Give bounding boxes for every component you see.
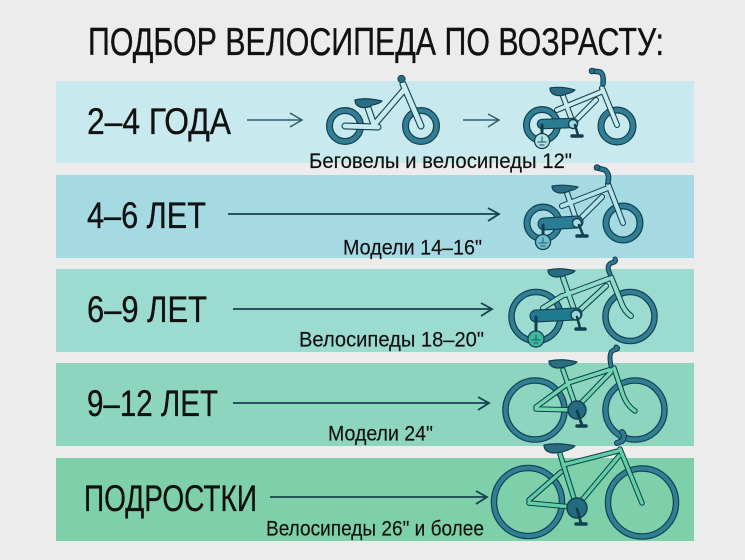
panel: 2–4 года: [56, 68, 694, 173]
caption: Беговелы и велосипеды 12": [309, 150, 572, 173]
heading: 6–9 лет: 6–9 ЛЕТ: [87, 289, 207, 330]
arrow: to balance bike: [247, 113, 302, 127]
arrow: to 12 inch bike: [463, 114, 499, 127]
caption: Модели 24": [328, 422, 433, 446]
heading: 2–4 года: 2–4 ГОДА: [87, 101, 231, 142]
heading: подростки: ПОДРОСТКИ: [84, 478, 257, 519]
panel: 4–6 лет: [56, 165, 694, 260]
panel: подростки: [56, 432, 694, 541]
icon: 14–16 inch bike: [527, 165, 640, 250]
arrow: [233, 397, 489, 410]
icon: balance bike: [330, 75, 436, 142]
panel: 6–9 лет: [56, 259, 694, 352]
icon: 12 inch bike with training wheel: [526, 68, 633, 148]
caption: Модели 14–16": [343, 236, 482, 260]
arrow: [270, 491, 487, 504]
heading: 9–12 лет: 9–12 ЛЕТ: [87, 383, 218, 424]
arrow: [228, 208, 499, 221]
heading: 4–6 лет: 4–6 ЛЕТ: [87, 195, 206, 236]
icon: 24 inch bike: [506, 347, 664, 440]
arrow: [233, 303, 492, 316]
icon: 26 inch bike: [494, 432, 676, 536]
panel: 9–12 лет: [56, 347, 694, 446]
caption: Велосипеды 18–20": [299, 328, 484, 352]
icon: 18–20 inch bike: [512, 259, 654, 347]
caption: Велосипеды 26" и более: [266, 518, 484, 540]
